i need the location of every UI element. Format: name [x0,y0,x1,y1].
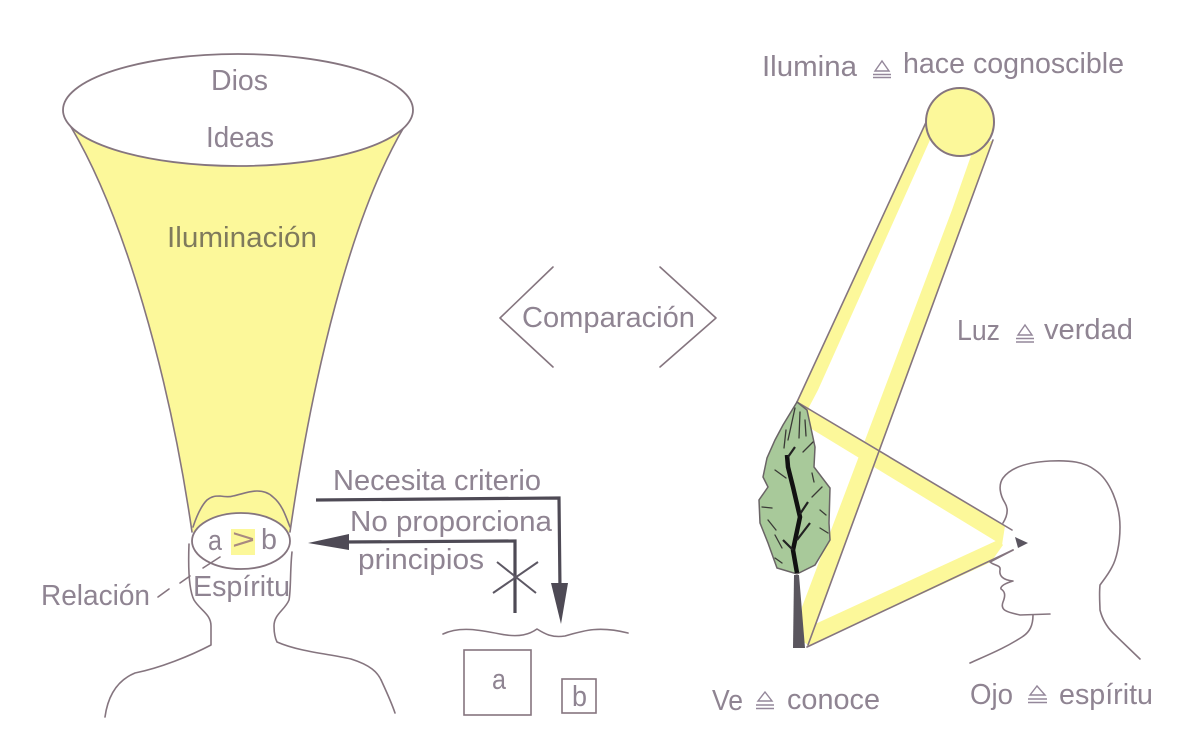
viewer profile head [970,461,1140,663]
figure: head and shoulders with spirit [105,491,395,717]
beam tree to eye upper [797,402,1005,545]
wavy surface line [443,629,628,637]
cross mark [493,562,538,593]
beam to tree right [801,140,993,645]
caption: Ilumina = hace cognoscible: hace cognoscible [903,48,1124,80]
relation label with dashed leader [41,557,220,612]
relation label with dashed leader: Relación [41,580,150,612]
comparison label with chevrons [500,267,716,367]
caption: Ojo = espíritu [970,679,1153,711]
text: a > b: > [232,524,255,556]
tree [759,402,830,648]
beam to tree left [797,118,930,409]
trunk [793,575,805,648]
text: a > b: b [261,524,277,556]
spirit ellipse [192,513,290,569]
heading: Iluminación: Iluminación [167,222,317,254]
box b [562,679,596,713]
text: a > b: a [208,525,223,557]
arrow: Necesita criterio [316,465,568,624]
arrow: Necesita criterio: Necesita criterio [333,465,541,497]
caption: Ve = conoce [712,684,880,717]
arrow: No proporciona principios: No proporciona [350,506,553,538]
neck [970,615,1033,663]
main vein [787,455,800,573]
caption: Ojo = espíritu: espíritu [1059,679,1153,711]
heading: Dios: Dios [211,65,268,97]
heading: Ideas: Ideas [206,122,274,154]
caption: Luz = verdad: Luz [957,315,1000,347]
sun rays and light beams [797,88,1013,647]
box b: b [572,681,587,713]
box a [464,650,531,715]
highlight behind greater-than [231,529,255,555]
leaf crown [759,402,830,574]
sun [926,88,994,156]
text: a > b [208,524,277,557]
caption: Ve = conoce: conoce [787,684,880,716]
head crown [193,491,290,527]
illumination funnel [63,54,413,532]
God ellipse [63,54,413,166]
caption: Ilumina = hace cognoscible [762,48,1124,83]
right body outline [274,552,395,713]
arrow: No proporciona principios [308,506,553,613]
eye [1015,537,1028,548]
left body outline [105,544,211,717]
box a: a [492,664,507,696]
beam tree to eye lower [807,540,1003,647]
caption: Luz = verdad: verdad [1044,314,1133,346]
face profile [990,550,1050,615]
text: Espíritu: Espíritu [193,571,290,603]
caption: Ojo = espíritu: Ojo [970,679,1013,711]
caption: Ve = conoce: Ve [712,685,743,717]
side veins [783,447,810,550]
comparison label with chevrons: Comparación [522,302,695,334]
caption: Ilumina = hace cognoscible: Ilumina [762,51,858,83]
caption: Luz = verdad [957,314,1133,347]
arrow: No proporciona principios: principios [358,544,484,576]
